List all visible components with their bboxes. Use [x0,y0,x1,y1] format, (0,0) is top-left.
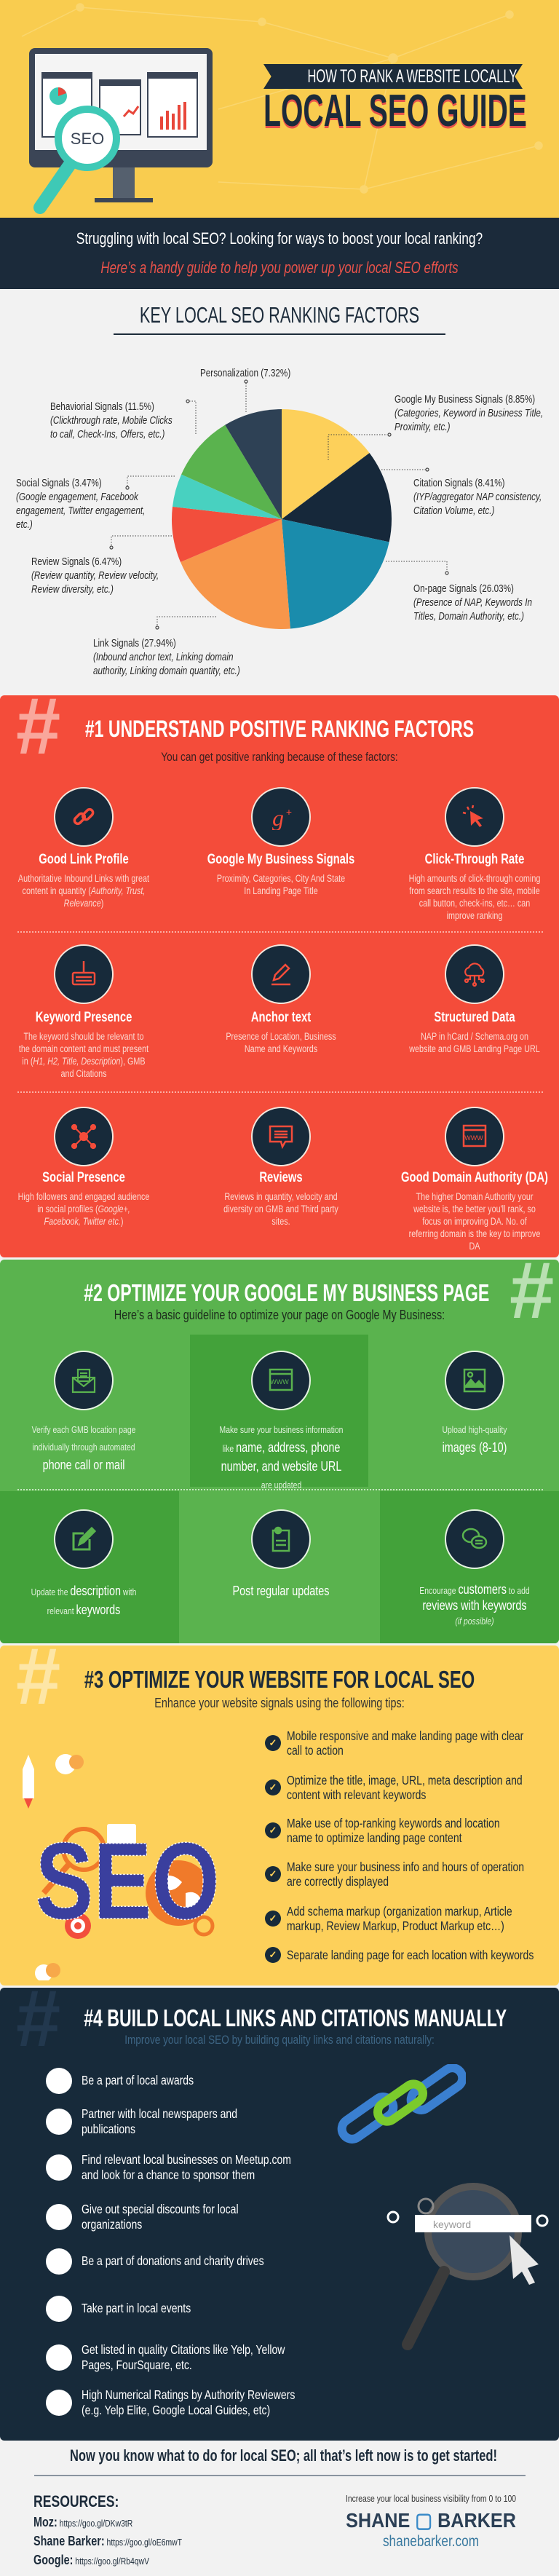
pie label: review: Review diversity, etc.) [31,583,114,596]
pie label: social: Social Signals (3.47%) [16,477,102,489]
closing line: Now you know what to do for local SEO; all that’s left now is to get started! [70,2446,497,2465]
item: ratings: High Numerical Ratings by Authority Reviewers [82,2387,295,2402]
title ribbon: HOW TO RANK A WEBSITE LOCALLY [308,66,517,87]
tip 4 [265,1860,524,1889]
tip 5 [265,1904,512,1933]
checklist [265,1728,534,1963]
illustration: chain [338,2064,466,2144]
pie label: personalization: Personalization (7.32%) [200,367,290,379]
main title: LOCAL SEO GUIDE [263,86,527,136]
checklist: ✓ [269,1868,277,1879]
icon: website: WWW [270,1378,289,1386]
item: newspapers: publications [82,2122,135,2136]
pie label: behavioral: Behaviorial Signals (11.5%) [50,400,154,413]
section 2 subtitle: Here’s a basic guideline to optimize your page on Google My Business: [114,1308,445,1322]
icon: review bubble [251,1107,311,1166]
icon: cursor [445,787,504,847]
icon: cloud network [445,944,504,1004]
item: citations: Get listed in quality Citations like Yelp, Yellow [82,2342,285,2357]
brand: shane barker [346,2493,516,2550]
factor: good link profile: Good Link Profile [39,852,129,867]
tip: upload images: images (8-10) [443,1440,507,1455]
factor: gmb signals: Google My Business Signals [207,852,354,867]
pie label: link: (Inbound anchor text, Linking domain [93,651,234,663]
section 2: google my business [0,1260,559,1643]
pie label: social: etc.) [16,518,33,531]
resources: Moz: https://goo.gl/DKw3tR [33,2515,132,2529]
pie label: gmb: (Categories, Keyword in Business Title, [395,407,543,419]
brand: shane barker: shanebarker.com [383,2533,479,2550]
factor: reviews: Reviews [259,1170,303,1185]
item: ratings [46,2387,295,2417]
tip 1 [265,1728,524,1758]
heading: key ranking factors: KEY LOCAL SEO RANKING FACTORS [140,302,419,328]
intro band: Here’s a handy guide to help you power up your local SEO efforts [100,258,459,277]
item: awards [46,2068,194,2094]
icon: link [54,787,114,847]
resources: Google: https://goo.gl/Rb4qwV [33,2553,149,2567]
checklist: ✓ [269,1825,277,1836]
factor: ctr: Click-Through Rate [425,852,524,867]
checklist: ✓ [269,1913,277,1924]
pie label: social [16,477,145,531]
brand: shane barker: Increase your local business visibility from 0 to 100 [346,2493,516,2504]
item: meetup: and look for a chance to sponsor them [82,2168,255,2182]
desc: da: The higher Domain Authority your website is, the better you'll rank, so focus on improving DA. No. of referring domain is the key to improve DA [409,1191,540,1252]
factor: social presence: Social Presence [42,1170,125,1185]
pie label: on-page [413,582,532,623]
section 3: optimize website [0,1645,559,1986]
section 3 subtitle: Enhance your website signals using the following tips: [154,1696,405,1710]
icon: mail [54,1351,114,1410]
item: events [46,2296,191,2322]
checklist: ✓ [269,1782,277,1793]
pie label: citation: (IYP/aggregator NAP consistency, [413,491,542,503]
pie label: review: Review Signals (6.47%) [31,556,122,568]
checklist: Separate landing page for each location with keywords [287,1948,534,1962]
icon: image [445,1351,504,1410]
checklist: Optimize the title, image, URL, meta description and content with relevant keywords [287,1773,523,1802]
section 4: links and citations [0,1988,559,2441]
item: charity: Be a part of donations and charity drives [82,2253,264,2268]
tip 6 [265,1947,534,1963]
section 1 heading: #1 UNDERSTAND POSITIVE RANKING FACTORS [85,716,474,742]
icon: monitor with SEO magnifier [29,48,213,214]
icon: edit [54,1509,114,1569]
item: discounts: organizations [82,2217,142,2232]
item: newspapers: Partner with local newspapers and [82,2106,237,2121]
item: events: Take part in local events [82,2301,191,2315]
section 3 heading: #3 OPTIMIZE YOUR WEBSITE FOR LOCAL SEO [84,1666,475,1693]
tip: reviews: Encourage customers to add reviews with keywords [419,1582,530,1613]
pie label: citation: Citation Signals (8.41%) [413,477,505,489]
checklist: ✓ [269,1949,277,1960]
factor: domain authority: Good Domain Authority (DA) [401,1170,548,1185]
pie label: gmb [395,393,543,433]
intro band: Struggling with local SEO? Looking for ways to boost your local ranking? [76,229,483,248]
tip: verify location: Verify each GMB location page individually through automated phone call or mail [32,1424,135,1472]
illustration: magnifier keyword [387,2183,549,2350]
illustration: SEO letters [23,1754,220,1980]
desc: ctr: High amounts of click-through coming from search results to the site, mobile call button, check-ins, etc… can improve ranking [409,873,540,921]
tip: description: Update the description with relevant keywords [31,1584,136,1617]
item: meetup [46,2152,291,2182]
icon: google plus [251,787,311,847]
checklist: Make use of top-ranking keywords and location name to optimize landing page content [287,1816,500,1845]
pie label: social: (Google engagement, Facebook [16,491,138,503]
heading: key ranking factors [114,302,445,335]
pie label: gmb: Proximity, etc.) [395,421,451,433]
pie label: on-page: On-page Signals (26.03%) [413,582,514,595]
item: discounts [46,2202,239,2232]
desc: social: High followers and engaged audience in social profiles (Google+, Facebook, Twitter etc.) [18,1191,149,1227]
icon: social network [54,1107,114,1166]
icon: www [445,1107,504,1166]
pie label: gmb: Google My Business Signals (8.85%) [395,393,535,406]
item: ratings: (e.g. Yelp Elite, Google Local Guides, etc) [82,2403,270,2417]
resources: RESOURCES: [33,2492,119,2510]
section 4 subtitle: Improve your local SEO by building quality links and citations naturally: [124,2033,435,2047]
icon: pinned note [251,1509,311,1569]
illustration: SEO letters: SEO [35,1820,220,1942]
tip 3 [265,1816,500,1845]
pie label: citation [413,477,542,517]
tip: regular updates: Post regular updates [233,1584,329,1598]
desc: structured: NAP in hCard / Schema.org on website and GMB Landing Page URL [409,1031,540,1054]
icon: keyboard [54,944,114,1004]
pie label: review [31,556,159,596]
section 2 heading: #2 OPTIMIZE YOUR GOOGLE MY BUSINESS PAGE [84,1279,489,1306]
factor: structured data: Structured Data [434,1010,515,1025]
header: yellow hero [0,0,559,218]
pie chart [109,379,449,630]
factor: anchor text: Anchor text [251,1010,311,1025]
icon: google plus: g [272,805,284,830]
pie label: social: engagement, Twitter engagement, [16,505,145,517]
icon: monitor with SEO magnifier: SEO [71,130,104,148]
tip 2 [265,1773,523,1802]
section 1: positive ranking factors [0,695,559,1257]
pie label: link [93,637,240,677]
section 4 heading: #4 BUILD LOCAL LINKS AND CITATIONS MANUALLY [84,2004,507,2031]
pie label: citation: Citation Volume, etc.) [413,505,494,517]
item: charity [46,2248,264,2275]
icon: chat [445,1509,504,1569]
desc: good link: Authoritative Inbound Links with great content in quantity (Authority, Trust, Relevance) [18,873,149,909]
checklist: Mobile responsive and make landing page with clear call to action [287,1728,523,1758]
desc: anchor: Presence of Location, Business Name and Keywords [226,1031,336,1054]
pie label: link: authority, Linking domain quantity, etc.) [93,665,240,677]
desc: keyword: The keyword should be relevant to the domain content and must present in (H1, H2, Title, Description), GMB and Citations [19,1031,148,1079]
desc: gmb: Proximity, Categories, City And State In Landing Page Title [217,873,345,896]
intro band [0,218,559,289]
checklist: Add schema markup (organization markup, Article markup, Review Markup, Product Markup etc…) [287,1904,512,1933]
icon: pencil [251,944,311,1004]
desc: reviews: Reviews in quantity, velocity and diversity on GMB and Third party sites. [223,1191,338,1227]
pie label: behavioral: to call, Check-Ins, Offers, etc.) [50,428,164,440]
item: awards: Be a part of local awards [82,2073,194,2087]
resources: Shane Barker: https://goo.gl/oE6mwT [33,2534,182,2548]
pie label: behavioral: (Clickthrough rate, Mobile Clicks [50,414,173,427]
factor: keyword presence: Keyword Presence [36,1010,132,1025]
item: citations: Pages, FourSquare, etc. [82,2358,192,2372]
item: citations [46,2342,285,2372]
item: meetup: Find relevant local businesses on Meetup.com [82,2152,291,2167]
checklist: Make sure your business info and hours of operation are correctly displayed [287,1860,524,1889]
item: newspapers [46,2106,237,2136]
pie label: link: Link Signals (27.94%) [93,637,176,649]
item: discounts: Give out special discounts for local [82,2202,239,2216]
pie label: on-page: Titles, Domain Authority, etc.) [413,610,524,623]
icon: google plus: + [286,806,292,818]
tip: upload images: Upload high-quality [442,1424,507,1435]
pie label: behavioral [50,400,173,440]
tip: business info: Make sure your business information like name, address, phone number, and website URL are updated [220,1424,343,1490]
pie label: on-page: (Presence of NAP, Keywords In [413,596,532,609]
tip: reviews [419,1582,530,1627]
illustration: magnifier keyword: keyword [433,2219,471,2230]
tip: upload images [442,1424,507,1455]
icon: www: WWW [464,1134,483,1142]
brand: shane barker: SHANE ▢ BARKER [346,2509,516,2532]
title ribbon [263,64,523,89]
checklist: ✓ [269,1737,277,1748]
pie label: review: (Review quantity, Review velocity, [31,569,159,582]
tip: reviews: (if possible) [455,1616,494,1627]
icon: website [251,1351,311,1410]
section 1 subtitle: You can get positive ranking because of these factors: [161,750,398,764]
resources [33,2492,182,2567]
